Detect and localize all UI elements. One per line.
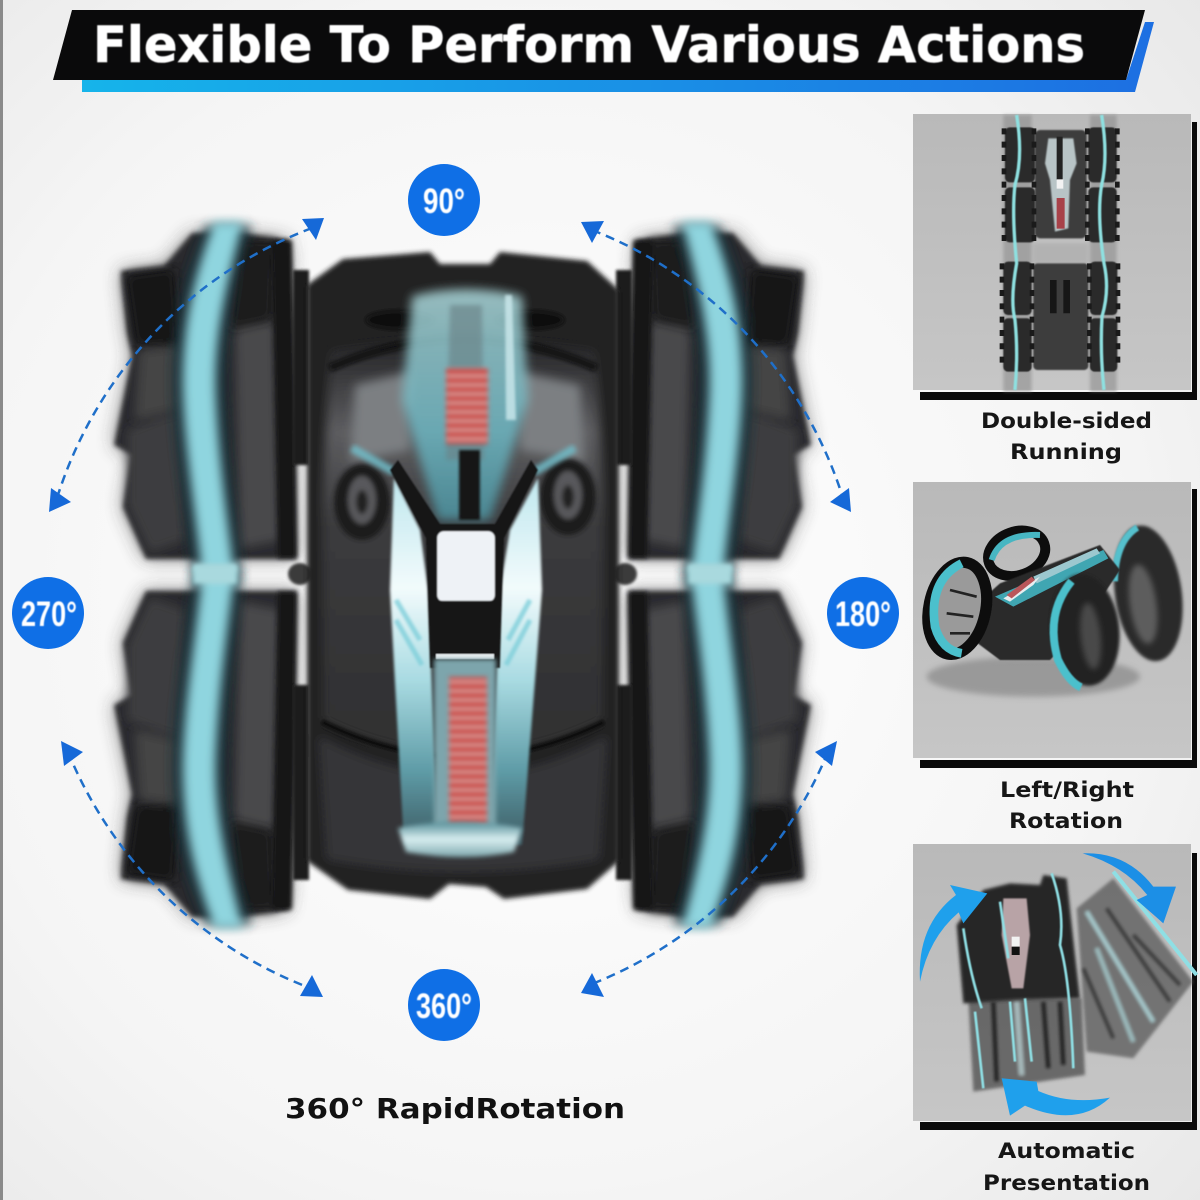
back small wheel: [982, 523, 1052, 584]
cyan tracks: [1013, 115, 1107, 390]
title text: Flexible To Perform Various Actions: [93, 16, 1085, 74]
hood texture: [350, 372, 585, 462]
car body: [970, 545, 1120, 660]
wheel: rear right: [616, 564, 811, 928]
badge: 360 degrees: [408, 969, 480, 1041]
dashed rotation arcs: [57, 228, 843, 988]
title banner: [53, 10, 1154, 92]
arrow: top right: [1083, 853, 1176, 923]
downward streaks: [968, 998, 1085, 1092]
badge: 180 degrees: [827, 577, 899, 649]
label: left/right rotation: Rotation: [1009, 809, 1123, 833]
black center strip: [459, 450, 480, 520]
red light top: [446, 368, 488, 444]
car: [957, 875, 1080, 1003]
side white stripes: [390, 478, 438, 845]
headlight domes: [334, 459, 596, 540]
near big wheel: [1045, 571, 1125, 690]
label: left/right rotation: Left/Right: [1000, 778, 1134, 802]
badge: 90 degrees: [408, 164, 480, 236]
motion streaks: [1003, 115, 1117, 392]
label: double-sided running: Double-sided: [981, 409, 1152, 433]
central glow streak: [402, 289, 528, 520]
label: double-sided running: Running: [1010, 440, 1122, 464]
top car: [1005, 127, 1117, 242]
cyan wing lines: [352, 448, 575, 472]
front small wheel: [920, 557, 995, 660]
car top stripes: [995, 548, 1108, 607]
cyan chevrons: [396, 600, 530, 665]
wheel: front right: [616, 222, 811, 586]
badge: 270 degrees: 270°: [21, 595, 77, 634]
badge: 360 degrees: 360°: [416, 987, 472, 1026]
arrowheads: [49, 218, 851, 997]
windshield black: [434, 601, 497, 654]
far big wheel: [1106, 521, 1191, 666]
badge: 90 degrees: 90°: [423, 182, 465, 221]
label: automatic presentation: Automatic: [998, 1139, 1135, 1163]
panel: automatic presentation: [913, 844, 1197, 1130]
centre rear panel: [434, 659, 496, 834]
badge: 270 degrees: [12, 577, 84, 649]
black Y frame: [390, 460, 538, 668]
label: double-sided running: [981, 409, 1152, 464]
axle nubs: [288, 563, 637, 585]
panel: double-sided running: [913, 114, 1197, 400]
arrow: bottom: [1002, 1078, 1110, 1116]
red light bottom: [449, 677, 487, 827]
rotated motion blur: [1077, 878, 1193, 1058]
main car: rapid rotation blur: [114, 222, 811, 928]
rotated cyan streak: [1113, 872, 1197, 975]
car body: [307, 252, 619, 899]
rear silver bumper: [398, 822, 522, 857]
label: left/right rotation: [1000, 778, 1134, 833]
wheel: rear left: [114, 564, 309, 928]
badge: 180 degrees: 180°: [835, 595, 891, 634]
cyan car lines: [963, 873, 1073, 1088]
wheel: front left: [114, 222, 309, 586]
panel: left/right rotation: [913, 482, 1197, 768]
wheel knobs: [1002, 128, 1118, 370]
car shadow: [927, 657, 1140, 697]
bottom car: [1003, 262, 1117, 372]
label: automatic presentation: [983, 1139, 1150, 1195]
windshield white: [437, 531, 495, 602]
caption: 360 rapid rotation: 360° RapidRotation: [285, 1092, 625, 1125]
arrow: left: [920, 885, 987, 982]
label: automatic presentation: Presentation: [983, 1171, 1150, 1195]
